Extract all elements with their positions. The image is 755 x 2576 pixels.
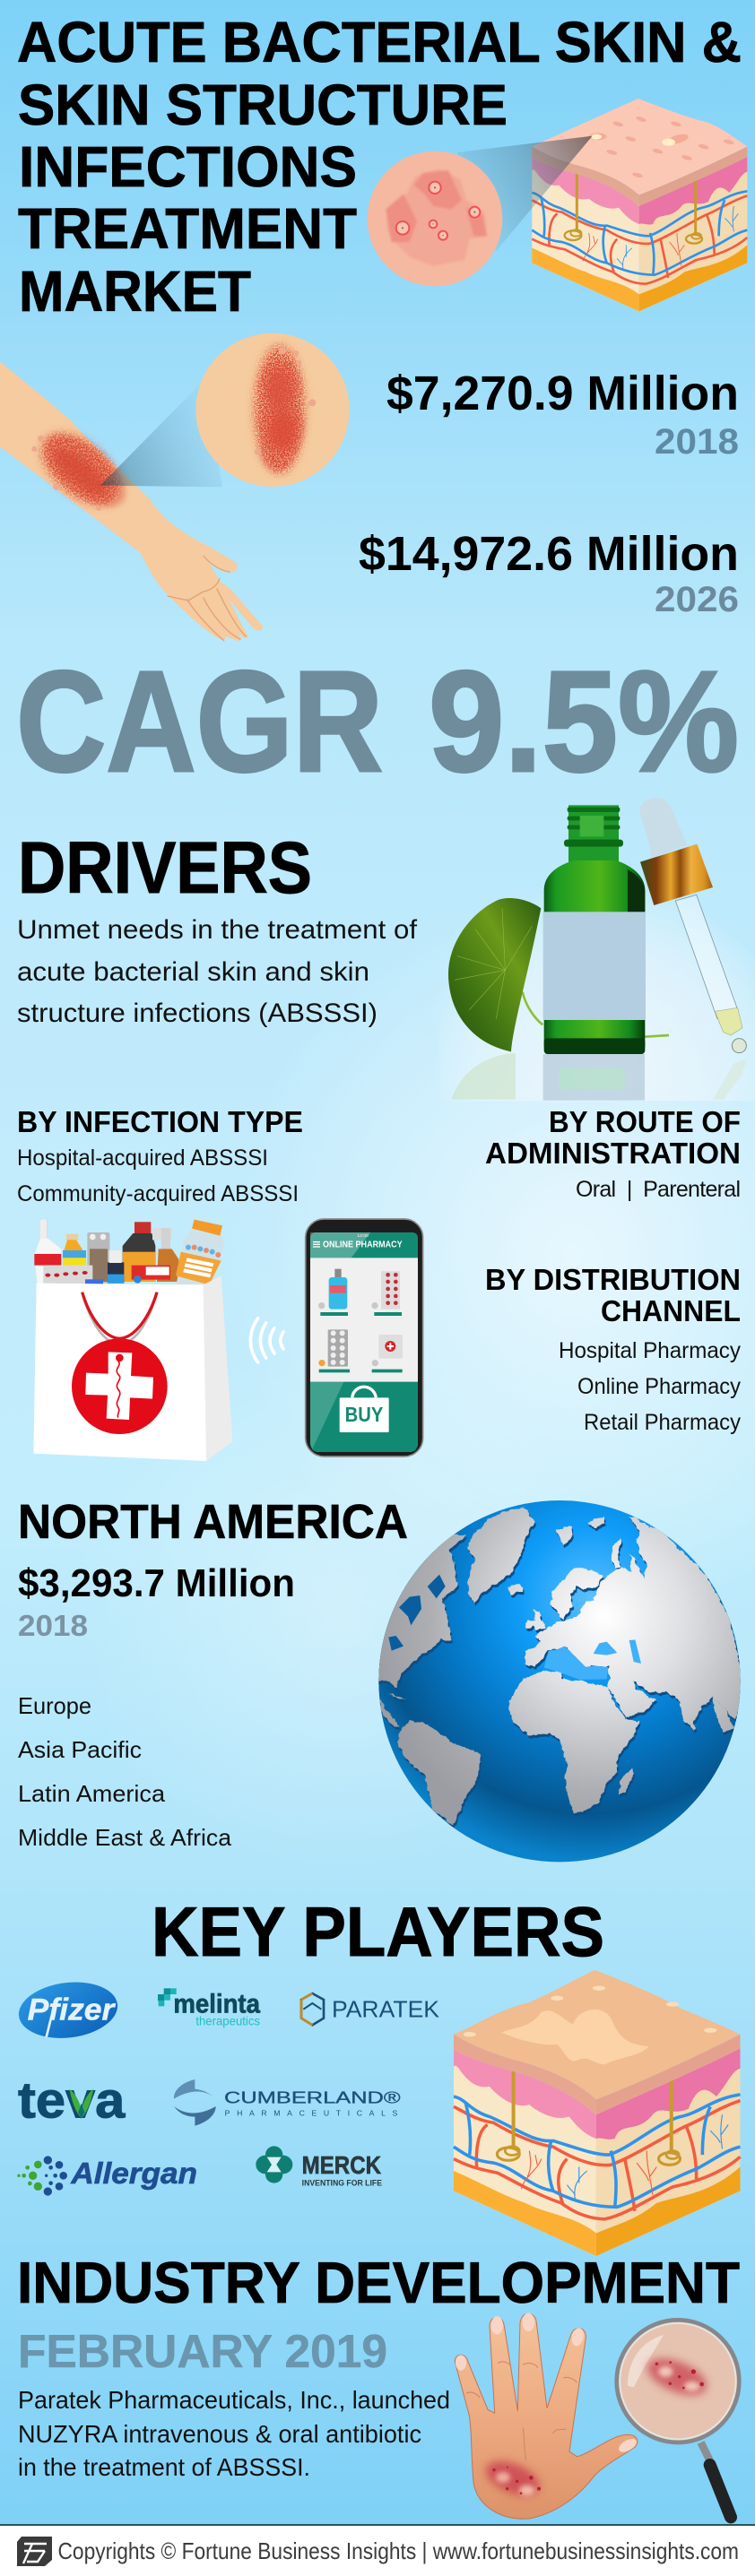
hand bbox=[455, 2312, 638, 2519]
illustration: hand and magnifier bbox=[455, 2312, 739, 2519]
logo: Paratek bbox=[301, 1993, 440, 2025]
CAGR headline: 9.5% bbox=[429, 641, 739, 801]
development text: in the treatment of ABSSSI. bbox=[18, 2453, 310, 2481]
bottle label bbox=[543, 912, 646, 1020]
title bbox=[17, 10, 742, 324]
by distribution channel bbox=[485, 1263, 741, 1435]
reflection bbox=[451, 1053, 747, 1101]
by route of administration bbox=[485, 1105, 741, 1202]
illustration: globe bbox=[377, 1500, 744, 1862]
key players heading: KEY PLAYERS bbox=[152, 1892, 604, 1971]
footer logo bbox=[17, 2537, 52, 2566]
title: INFECTIONS bbox=[19, 134, 357, 199]
rash on arm bbox=[29, 419, 138, 521]
illustration: green bottle, leaf and dropper bbox=[439, 798, 755, 1101]
phone header text: ONLINE PHARMACY bbox=[323, 1240, 403, 1250]
other regions: Europe bbox=[18, 1692, 91, 1719]
by infection type: Hospital-acquired ABSSSI bbox=[17, 1145, 268, 1171]
title: TREATMENT bbox=[18, 196, 357, 261]
by route of administration: BY ROUTE OF bbox=[549, 1105, 741, 1138]
logo: Melinta bbox=[158, 1988, 261, 2027]
by route of administration: Oral | Parenteral bbox=[576, 1177, 741, 1202]
zoom cone bbox=[100, 381, 222, 487]
phone: 12:00 bbox=[357, 1233, 369, 1239]
drivers text: structure infections (ABSSSI) bbox=[17, 998, 378, 1028]
date: FEBRUARY 2019 bbox=[18, 2326, 387, 2378]
buy button: BUY bbox=[345, 1403, 383, 1426]
market value 2018: $7,270.9 Million bbox=[386, 367, 739, 420]
phone products bbox=[318, 1269, 403, 1372]
market value 2026: $14,972.6 Million bbox=[359, 527, 739, 581]
logo: Pfizer: Pfizer bbox=[28, 1993, 116, 2027]
north america heading: NORTH AMERICA bbox=[18, 1495, 408, 1549]
drivers text: Unmet needs in the treatment of bbox=[17, 915, 418, 945]
market value 2018 bbox=[386, 367, 739, 462]
by route of administration: ADMINISTRATION bbox=[485, 1137, 741, 1170]
skin block surface bbox=[532, 99, 747, 206]
skin block surface bbox=[454, 1970, 741, 2114]
industry development heading: INDUSTRY DEVELOPMENT bbox=[17, 2250, 740, 2315]
illustration: arm with rash bbox=[0, 333, 350, 641]
shopping bag bbox=[33, 1275, 232, 1461]
phone bbox=[306, 1219, 423, 1457]
title: SKIN STRUCTURE bbox=[18, 73, 508, 137]
logo: Melinta: therapeutics bbox=[195, 2013, 260, 2027]
logo: Cumberland bbox=[174, 2079, 401, 2126]
continents bbox=[377, 1508, 744, 1828]
other regions bbox=[18, 1692, 232, 1851]
by distribution channel: Retail Pharmacy bbox=[584, 1410, 741, 1435]
logo: Cumberland: CUMBERLAND® bbox=[224, 2088, 401, 2107]
illustration: medicine bag, signal and phone bbox=[33, 1219, 423, 1461]
drivers heading: DRIVERS bbox=[18, 827, 312, 909]
company logos bbox=[15, 1976, 440, 2196]
magnification cone bbox=[457, 136, 593, 251]
north america value: 2018 bbox=[18, 1609, 88, 1642]
arm bbox=[0, 361, 263, 641]
market value 2018: 2018 bbox=[655, 422, 739, 462]
stem bbox=[645, 1035, 669, 1037]
medicines bbox=[34, 1219, 224, 1284]
by infection type: BY INFECTION TYPE bbox=[17, 1105, 303, 1138]
other regions: Middle East & Africa bbox=[18, 1824, 232, 1851]
by infection type bbox=[17, 1105, 303, 1206]
logo: Teva: teva bbox=[18, 2073, 126, 2130]
CAGR headline bbox=[16, 641, 739, 801]
bottle bbox=[544, 805, 645, 1054]
other regions: Latin America bbox=[18, 1780, 166, 1807]
market value 2026: 2026 bbox=[655, 580, 739, 619]
logo: Cumberland: PHARMACEUTICALS bbox=[225, 2109, 398, 2118]
logo: Merck: MERCK bbox=[302, 2151, 381, 2179]
by distribution channel: Hospital Pharmacy bbox=[559, 1338, 741, 1363]
logo: Merck bbox=[256, 2146, 382, 2188]
logo: Allergan: Allergan bbox=[70, 2157, 197, 2191]
drivers text bbox=[17, 915, 418, 1028]
buy button bbox=[340, 1387, 389, 1432]
development text: NUZYRA intravenous & oral antibiotic bbox=[18, 2420, 421, 2448]
title: ACUTE BACTERIAL SKIN & bbox=[17, 10, 742, 74]
soft backdrop bbox=[439, 878, 755, 1101]
skin block sides bbox=[532, 155, 747, 311]
dropper bbox=[639, 798, 746, 1053]
market value 2026 bbox=[359, 527, 739, 619]
ocean bbox=[378, 1500, 741, 1862]
logo: Allergan bbox=[17, 2156, 197, 2196]
signal icon bbox=[250, 1318, 283, 1362]
rash close-up bbox=[195, 333, 350, 487]
lesion close-up bbox=[368, 151, 502, 286]
drivers text: acute bacterial skin and skin bbox=[17, 957, 369, 987]
by distribution channel: Online Pharmacy bbox=[577, 1374, 741, 1399]
by distribution channel: BY DISTRIBUTION bbox=[485, 1263, 741, 1296]
north america value: $3,293.7 Million bbox=[18, 1561, 295, 1605]
leaf bbox=[448, 898, 542, 1051]
footer bbox=[0, 2524, 755, 2576]
by infection type: Community-acquired ABSSSI bbox=[17, 1181, 299, 1206]
logo: Pfizer bbox=[15, 1976, 121, 2044]
by distribution channel: CHANNEL bbox=[601, 1294, 741, 1327]
illustration: skin cross-section with infected lesion bbox=[368, 99, 747, 311]
CAGR headline: CAGR bbox=[16, 641, 383, 801]
logo: Paratek: PARATEK bbox=[332, 1996, 440, 2023]
illustration: skin block bbox=[454, 1970, 741, 2256]
magnifier bbox=[617, 2320, 739, 2517]
development text bbox=[18, 2386, 450, 2481]
skin block sides bbox=[454, 2046, 741, 2256]
title: MARKET bbox=[19, 259, 251, 324]
logo: Merck: INVENTING FOR LIFE bbox=[302, 2179, 382, 2188]
other regions: Asia Pacific bbox=[18, 1736, 142, 1763]
north america value bbox=[18, 1561, 295, 1642]
development text: Paratek Pharmaceuticals, Inc., launched bbox=[18, 2386, 450, 2414]
logo: Melinta: melinta bbox=[173, 1990, 261, 2019]
